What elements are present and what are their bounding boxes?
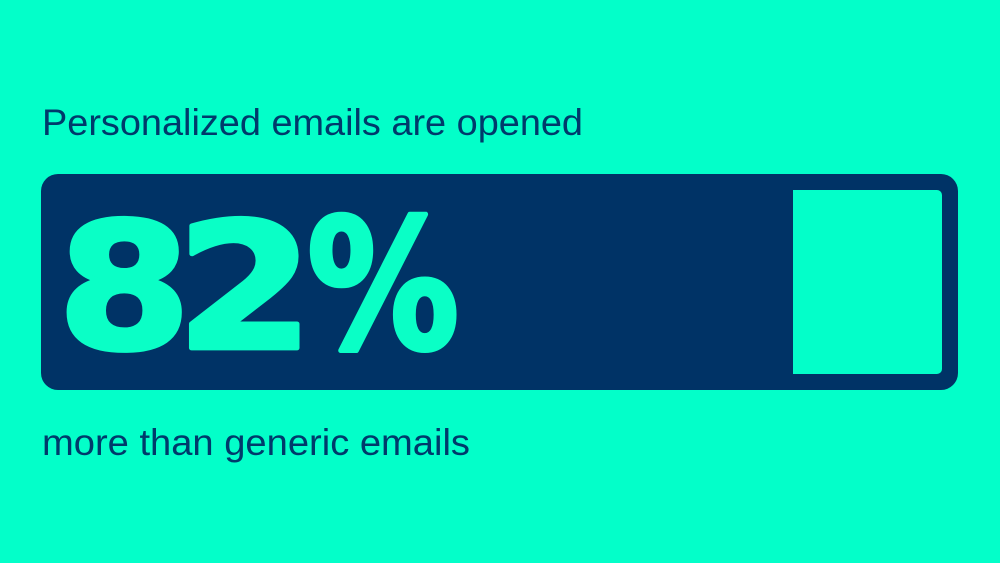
big number: 82% — [58, 182, 459, 391]
big number: 82%: 2 — [176, 186, 314, 390]
big number: 82%: 8 — [58, 187, 191, 390]
text: bottom line: more than generic emails — [42, 422, 470, 463]
battery-style progress bar — [41, 174, 958, 391]
bar background — [41, 174, 958, 390]
heading: top line: Personalized emails are opened — [42, 102, 583, 143]
bar remaining cell — [793, 190, 942, 374]
big number: 82%: % — [307, 182, 459, 391]
